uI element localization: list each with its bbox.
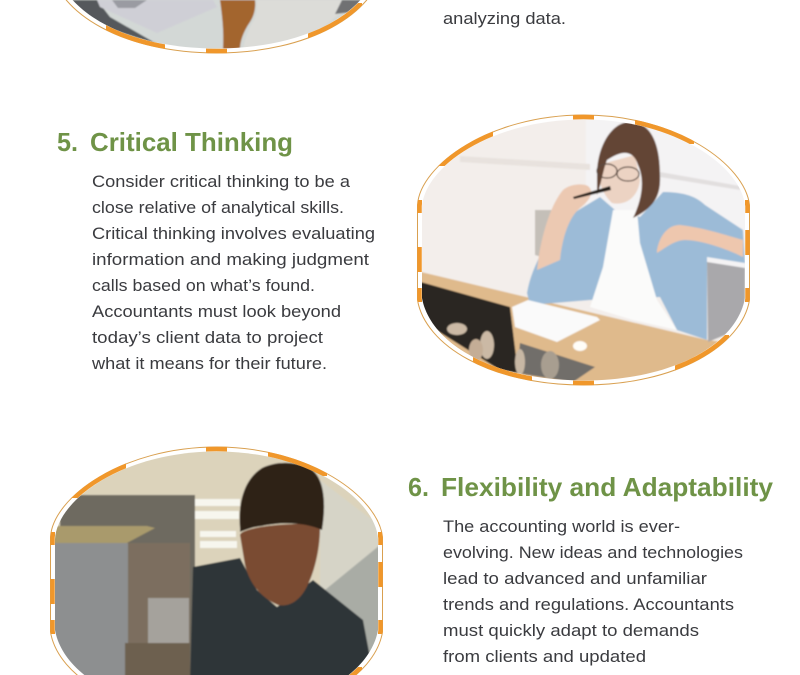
heading: 6. Flexibility and Adaptability: Flexibility and Adaptability	[441, 472, 774, 502]
heading: 5. Critical Thinking: Critical Thinking	[90, 127, 293, 157]
body text: critical thinking: calls based on what’s found.	[92, 276, 315, 295]
body text: flexibility and adaptability: must quickly adapt to demands	[443, 621, 699, 640]
body text: flexibility and adaptability: The accounting world is ever-	[443, 517, 680, 536]
photo frame: woman thinking at a desk	[410, 110, 756, 390]
body text: critical thinking: close relative of analytical skills.	[92, 198, 344, 217]
body text: critical thinking: information and making judgment	[92, 250, 369, 269]
body text: end of section 4: analyzing data.	[443, 9, 566, 28]
body text: critical thinking: what it means for their future.	[91, 354, 327, 373]
body text: flexibility and adaptability: trends and regulations. Accountants	[443, 595, 734, 614]
body text: flexibility and adaptability: evolving. New ideas and technologies	[443, 543, 743, 562]
body text: critical thinking: Accountants must look beyond	[92, 302, 341, 321]
body text: critical thinking: Critical thinking involves evaluating	[92, 224, 375, 243]
heading: 6. Flexibility and Adaptability: 6.	[408, 472, 429, 502]
photo frame: laptop on desk (top, cropped)	[66, 0, 368, 54]
photo frame: man looking down in a hallway	[45, 440, 390, 675]
body text: flexibility and adaptability	[443, 517, 743, 666]
body text: critical thinking: Consider critical thinking to be a	[92, 172, 351, 191]
body text: critical thinking	[91, 172, 375, 373]
body text: flexibility and adaptability: lead to advanced and unfamiliar	[443, 569, 707, 588]
heading: 5. Critical Thinking: 5.	[57, 127, 78, 157]
body text: critical thinking: today’s client data to project	[92, 328, 323, 347]
body text: flexibility and adaptability: from clients and updated	[443, 647, 646, 666]
